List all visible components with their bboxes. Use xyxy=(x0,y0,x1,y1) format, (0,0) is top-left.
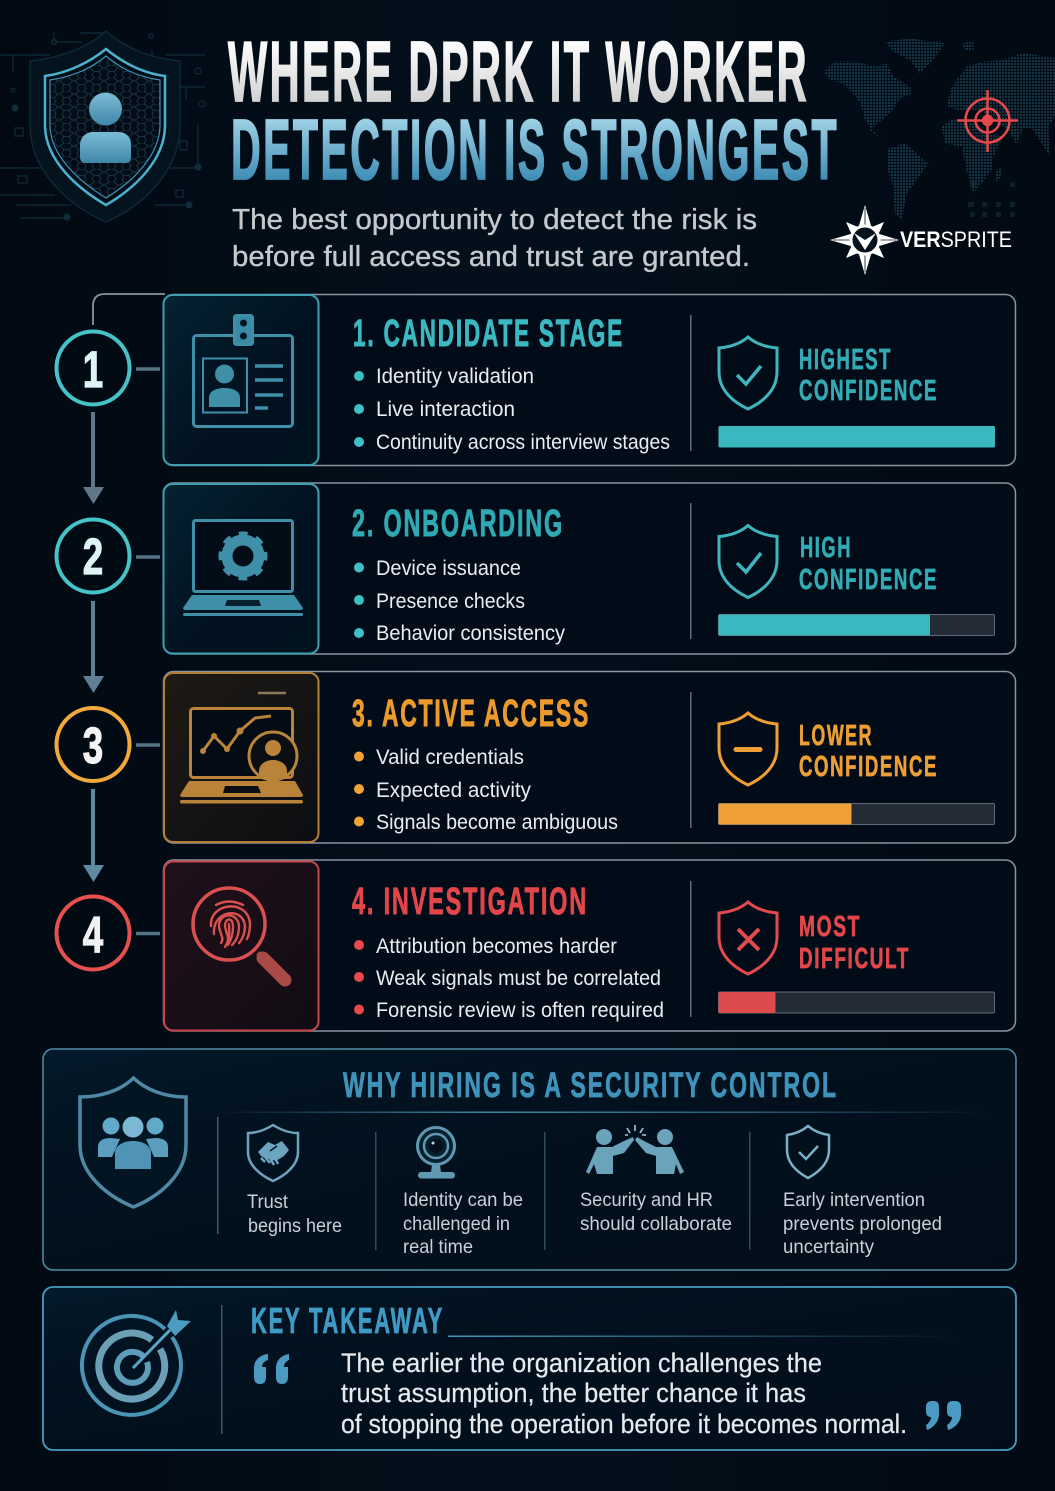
icon: shield minus xyxy=(719,713,777,785)
item: trust begins here: begins here xyxy=(248,1215,342,1237)
icon: target with arrow xyxy=(82,1310,191,1415)
item: identity can be challenged: challenged in xyxy=(403,1213,510,1235)
bullet list xyxy=(354,365,670,454)
item: early intervention xyxy=(783,1126,942,1258)
quote text xyxy=(341,1348,907,1439)
subtitle: The best opportunity to detect the risk is xyxy=(232,204,757,236)
subtitle xyxy=(232,204,757,273)
bullet list xyxy=(354,746,618,834)
confidence bar xyxy=(718,804,994,824)
icon: shield check xyxy=(719,526,777,598)
quote text: trust assumption, the better chance it has xyxy=(341,1378,806,1408)
bullet list: Behavior consistency xyxy=(376,622,565,645)
title xyxy=(228,25,839,198)
icon: magnifier over fingerprint xyxy=(193,888,285,980)
bullet list: Continuity across interview stages xyxy=(376,431,670,454)
icon: ID badge xyxy=(194,316,292,426)
bullet list xyxy=(354,557,565,645)
difficulty label: DIFFICULT xyxy=(799,943,910,975)
icon: opening quote xyxy=(254,1354,289,1384)
heading: 3. ACTIVE ACCESS xyxy=(352,693,590,735)
item: trust begins here xyxy=(247,1125,342,1237)
step marker 3 xyxy=(56,708,130,781)
logo: VerSprite xyxy=(830,205,1012,275)
confidence label: CONFIDENCE xyxy=(799,564,938,596)
confidence label: HIGHEST xyxy=(799,344,892,376)
bullet list: Live interaction xyxy=(376,398,515,421)
quote text: of stopping the operation before it becomes normal. xyxy=(341,1409,907,1439)
world map with target xyxy=(823,38,1055,220)
bullet list: Device issuance xyxy=(376,557,521,580)
confidence label: CONFIDENCE xyxy=(799,375,938,407)
item: identity can be challenged: real time xyxy=(403,1236,473,1258)
logo: VerSprite: VERSPRITE xyxy=(900,227,1012,252)
panel: key takeaway xyxy=(43,1287,1016,1450)
bullet list: Identity validation xyxy=(376,365,534,388)
arrow: step 3 to 4 xyxy=(83,789,104,882)
bullet list: Signals become ambiguous xyxy=(376,811,618,834)
panel: investigation xyxy=(164,860,1016,1031)
step marker 2: 2 xyxy=(83,529,103,585)
icon: shield cross xyxy=(719,902,777,974)
bullet list: Expected activity xyxy=(376,779,531,802)
item: security and HR collaborate: should collaborate xyxy=(580,1213,732,1235)
item: early intervention: uncertainty xyxy=(783,1236,874,1258)
confidence label xyxy=(799,720,938,783)
panel: candidate stage xyxy=(164,294,1016,466)
confidence label: HIGH xyxy=(800,532,852,564)
confidence label xyxy=(799,532,938,596)
bullet list: Attribution becomes harder xyxy=(376,935,617,958)
bullet list xyxy=(354,935,664,1022)
step marker 1: 1 xyxy=(83,342,103,398)
item: early intervention: Early intervention xyxy=(783,1189,925,1211)
subtitle: before full access and trust are granted. xyxy=(232,241,750,273)
panel: active access xyxy=(164,672,1016,843)
heading: 4. INVESTIGATION xyxy=(352,881,588,923)
confidence label: LOWER xyxy=(799,720,873,752)
bullet list: Presence checks xyxy=(376,590,525,613)
icon: closing quote xyxy=(926,1401,961,1430)
timeline connector xyxy=(83,294,165,934)
item: identity can be challenged xyxy=(403,1128,523,1258)
arrow: step 2 to 3 xyxy=(83,601,104,693)
difficulty label xyxy=(799,911,910,975)
bullet list: Weak signals must be correlated xyxy=(376,967,661,990)
icon: shield check xyxy=(719,337,777,409)
step marker 2 xyxy=(56,520,130,592)
step marker 1 xyxy=(56,332,130,404)
arrow: step 1 to 2 xyxy=(83,412,104,504)
confidence label xyxy=(799,344,938,407)
icon: laptop with activity chart and user xyxy=(180,693,303,804)
step marker 4 xyxy=(56,896,130,970)
bullet list: Valid credentials xyxy=(376,746,524,769)
quote text: The earlier the organization challenges the xyxy=(341,1348,822,1378)
heading: KEY TAKEAWAY xyxy=(251,1300,444,1341)
icon: laptop with gear xyxy=(183,520,303,616)
item: security and HR collaborate xyxy=(580,1125,732,1235)
step marker 3: 3 xyxy=(83,718,103,774)
panel: why hiring is a security control xyxy=(43,1049,1016,1270)
item: early intervention: prevents prolonged xyxy=(783,1213,942,1235)
difficulty label: MOST xyxy=(799,911,861,943)
item: identity can be challenged: Identity can be xyxy=(403,1189,523,1211)
confidence bar xyxy=(718,992,994,1013)
item: trust begins here: Trust xyxy=(247,1191,289,1213)
icon: shield with team xyxy=(80,1078,186,1207)
confidence label: CONFIDENCE xyxy=(799,751,938,783)
confidence bar xyxy=(718,614,994,636)
heading: 1. CANDIDATE STAGE xyxy=(353,313,624,355)
item: security and HR collaborate: Security and HR xyxy=(580,1189,713,1211)
confidence bar xyxy=(718,426,995,448)
step marker 4: 4 xyxy=(83,907,103,963)
heading: 2. ONBOARDING xyxy=(352,503,564,545)
bullet list: Forensic review is often required xyxy=(376,999,664,1022)
icon: red target crosshair xyxy=(957,90,1018,152)
header illustration: shield with person xyxy=(0,31,205,222)
panel: onboarding xyxy=(164,483,1016,654)
